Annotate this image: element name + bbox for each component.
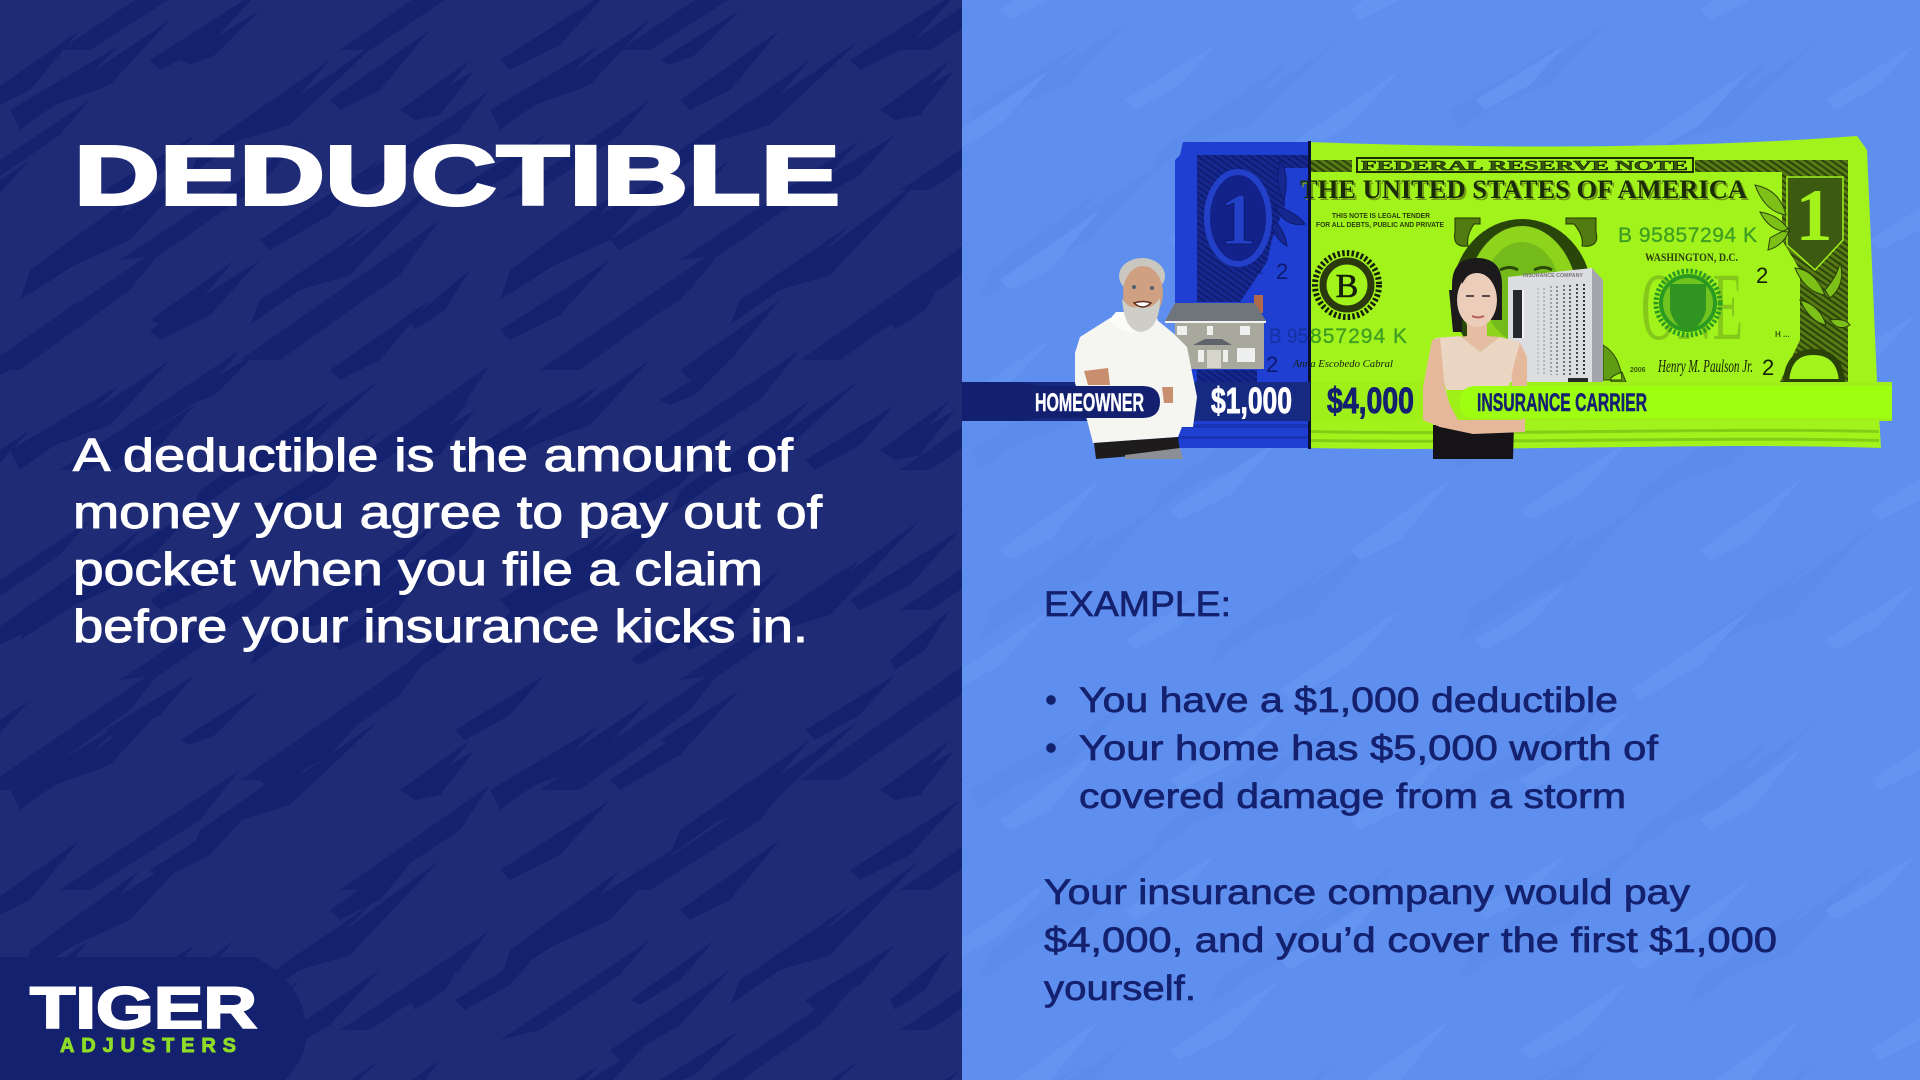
bill: treasurer signature: Anna Escobedo Cabral bbox=[1292, 358, 1393, 370]
bill: The United States of America: THE UNITED STATES OF AMERICA bbox=[1300, 175, 1747, 204]
bill: blue homeowner portion: B 95 bbox=[1269, 325, 1308, 348]
divider between blue and lime bbox=[1308, 141, 1311, 449]
text block: definition: pocket when you file a claim bbox=[73, 543, 763, 595]
label: insurance carrier pill bbox=[1460, 386, 1892, 418]
panel: left navy background bbox=[0, 0, 962, 1080]
text block: definition: before your insurance kicks in. bbox=[73, 600, 808, 652]
bill: blue homeowner portion bbox=[1175, 142, 1309, 448]
logo: Tiger Adjusters bbox=[0, 957, 307, 1080]
text block: definition: money you agree to pay out of bbox=[73, 486, 822, 538]
bill: Federal Reserve seal: B bbox=[1336, 268, 1358, 305]
bill: blue numeral 1: 1 bbox=[1220, 179, 1256, 261]
bullet list: Your home has $5,000 worth of bbox=[1079, 729, 1658, 768]
amount: homeowner $1,000: $1,000 bbox=[1211, 380, 1292, 421]
text block: definition: A deductible is the amount of bbox=[73, 429, 793, 481]
bill: lime insurance portion: 2 bbox=[1756, 263, 1768, 288]
bullet list: You have a $1,000 deductible bbox=[1079, 681, 1618, 720]
bill: legal tender note: FOR ALL DEBTS, PUBLIC AND PRIVATE bbox=[1316, 220, 1444, 229]
heading: example: EXAMPLE: bbox=[1044, 585, 1231, 624]
bill: portrait oval bbox=[1452, 218, 1597, 386]
bullet list bbox=[1046, 681, 1658, 816]
panel: right blue background bbox=[962, 0, 1920, 1080]
bill: right engraved column bbox=[1755, 172, 1850, 382]
bill: Federal Reserve seal bbox=[1315, 253, 1379, 317]
bill: lime insurance portion: 2006 bbox=[1630, 367, 1646, 374]
band: dollar split bbox=[962, 382, 1892, 421]
label: homeowner pill bbox=[962, 382, 1160, 421]
paragraph: outcome: $4,000, and you’d cover the first $1,000 bbox=[1044, 921, 1777, 960]
paragraph: outcome: yourself. bbox=[1044, 969, 1196, 1008]
bill: Washington D.C.: WASHINGTON, D.C. bbox=[1645, 250, 1738, 264]
bill: lime insurance portion bbox=[1292, 136, 1881, 449]
bill: lime insurance portion: H ... bbox=[1775, 330, 1790, 339]
title: DEDUCTIBLE bbox=[74, 128, 840, 222]
bill: blue homeowner portion: 2 bbox=[1276, 259, 1288, 284]
text block: example bbox=[1044, 585, 1777, 1008]
bill: legal tender note: THIS NOTE IS LEGAL TENDER bbox=[1332, 211, 1431, 220]
bill: watermark word: ONE bbox=[1641, 253, 1743, 360]
bill: blue homeowner portion: H. bbox=[1255, 266, 1264, 276]
bill: Treasury seal bbox=[1656, 271, 1720, 335]
bill: right engraved column: 1 bbox=[1796, 175, 1832, 257]
bill: legal tender note bbox=[1316, 211, 1444, 229]
bill: lower leaves bbox=[1603, 345, 1626, 382]
logo: Tiger Adjusters: ADJUSTERS bbox=[60, 1035, 236, 1057]
bill: serial number left: 857294 K bbox=[1310, 325, 1407, 348]
person: insurance carrier bbox=[1423, 258, 1527, 459]
paragraph: outcome: Your insurance company would pay bbox=[1044, 873, 1691, 912]
illustration: split dollar bill bbox=[962, 136, 1892, 459]
icon: house bbox=[1165, 295, 1266, 369]
label: homeowner pill: HOMEOWNER bbox=[1035, 389, 1144, 417]
amount: insurance carrier $4,000: $4,000 bbox=[1327, 380, 1414, 421]
bill: serial number right: B 95857294 K bbox=[1618, 224, 1757, 247]
bill: The United States of America: THE UNITED STATES OF AMERICA bbox=[1302, 177, 1749, 206]
bill: secretary signature: Henry M. Paulson Jr. bbox=[1657, 356, 1753, 376]
person: homeowner bbox=[1075, 258, 1197, 459]
icon: insurance company building bbox=[1508, 268, 1603, 382]
bill: Federal Reserve Note strip bbox=[1357, 158, 1693, 174]
icon: insurance company building: INSURANCE COMPANY bbox=[1523, 273, 1584, 279]
text block: definition bbox=[73, 429, 822, 652]
bill: Federal Reserve Note strip: FEDERAL RESERVE NOTE bbox=[1361, 159, 1688, 174]
logo: Tiger Adjusters: TIGER bbox=[30, 976, 257, 1041]
label: insurance carrier pill: INSURANCE CARRIER bbox=[1477, 389, 1647, 417]
bill: blue homeowner portion: 2 bbox=[1266, 352, 1278, 377]
paragraph: outcome bbox=[1044, 873, 1777, 1008]
bullet list: covered damage from a storm bbox=[1079, 777, 1626, 816]
bill: lime insurance portion: 2 bbox=[1762, 355, 1774, 380]
